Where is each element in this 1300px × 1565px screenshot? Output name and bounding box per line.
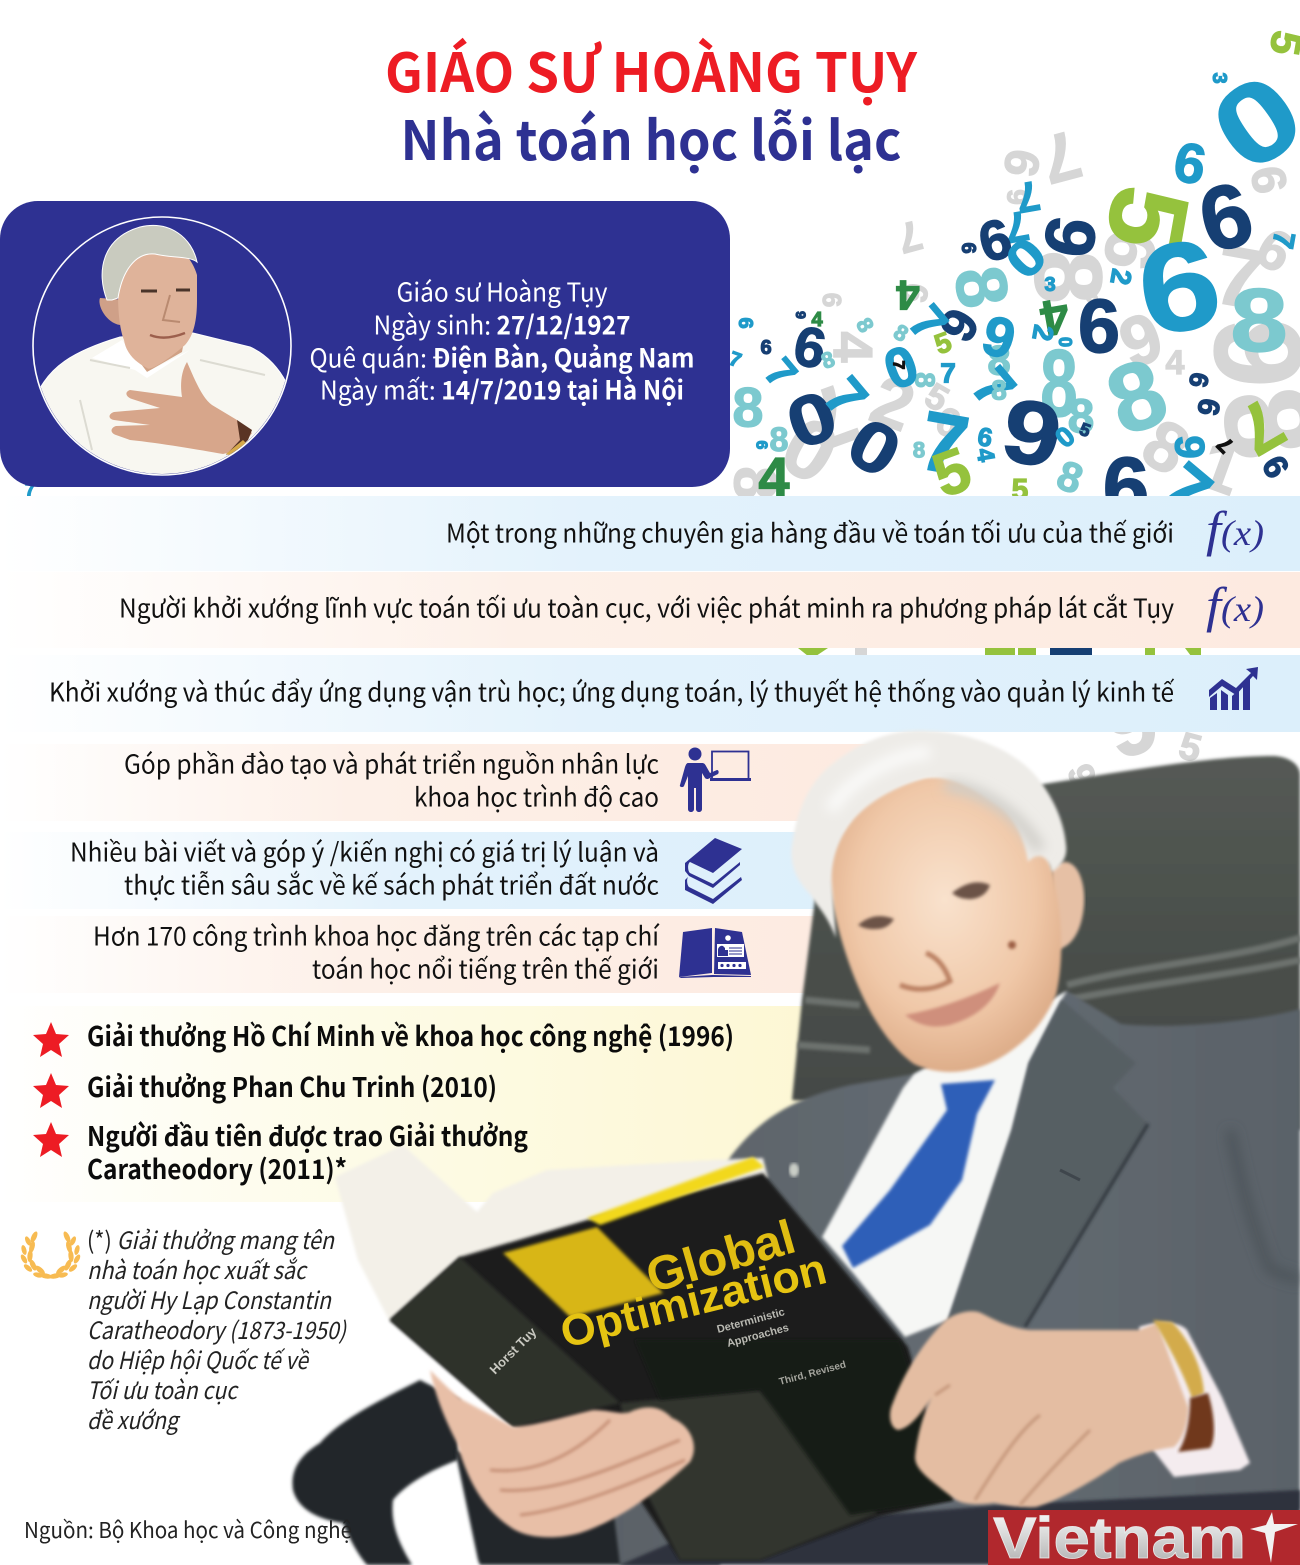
title	[385, 29, 918, 176]
background scattered numbers: 6	[1183, 370, 1215, 390]
background scattered numbers: 6	[1190, 396, 1226, 418]
decorative numbers below rows: 5	[1174, 725, 1206, 771]
footnote on Caratheodory prize: người Hy Lạp Constantin	[87, 1281, 332, 1316]
panel: awards background	[0, 1006, 820, 1202]
background scattered numbers: 3	[1208, 72, 1230, 84]
decorative numbers below rows: 9	[1059, 759, 1105, 791]
background scattered numbers: 9	[995, 378, 1069, 488]
awards list: Caratheodory (2011)*	[87, 1148, 347, 1187]
dark area under the book	[455, 1450, 720, 1565]
heading: subtitle: Nhà toán học lỗi lạc	[400, 97, 902, 176]
footnote on Caratheodory prize: Caratheodory (1873-1950)	[87, 1311, 347, 1346]
cuff	[1139, 1323, 1250, 1477]
biography text	[310, 272, 694, 408]
background scattered numbers: 7	[898, 294, 958, 352]
biography text: Giáo sư Hoàng Tụy	[396, 272, 608, 310]
biography text: Ngày mất: 14/7/2019 tại Hà Nội	[320, 370, 684, 408]
background scattered numbers: 7	[755, 349, 807, 397]
background scattered numbers: 4	[971, 446, 1000, 465]
background scattered numbers: 0	[1049, 420, 1081, 454]
decorative numbers below rows	[1059, 665, 1206, 791]
background scattered numbers: 6	[993, 145, 1049, 181]
background scattered numbers: 0	[766, 398, 854, 502]
footnote on Caratheodory prize: do Hiệp hội Quốc tế về	[87, 1341, 310, 1376]
background scattered numbers: 4	[758, 446, 790, 508]
background scattered numbers: 8	[910, 372, 940, 388]
lapel pin	[789, 1163, 799, 1177]
icon: open journal	[679, 928, 751, 978]
background scattered numbers: 6	[930, 399, 966, 447]
background scattered numbers: 6	[895, 280, 935, 306]
background scattered numbers: 6	[1169, 129, 1211, 197]
background scattered numbers: 4	[896, 272, 920, 318]
book cover title: Approaches	[726, 1322, 790, 1350]
background scattered numbers: 7	[1012, 172, 1044, 222]
background scattered numbers: 8	[1040, 329, 1078, 437]
background scattered numbers: 7	[1033, 115, 1089, 199]
background scattered numbers: 8	[732, 376, 764, 438]
background scattered numbers: 5	[1077, 419, 1093, 441]
background scattered numbers: 8	[1230, 269, 1288, 371]
footnote on Caratheodory prize: (*) Giải thưởng mang tên	[87, 1221, 335, 1256]
shirt	[822, 991, 1067, 1337]
photo: professor with book	[292, 730, 1300, 1565]
background scattered numbers: 8	[770, 421, 788, 459]
background scattered numbers: 4	[1166, 344, 1185, 382]
background scattered numbers: 2	[861, 360, 925, 446]
icon: star	[33, 1122, 69, 1157]
awards list: Người đầu tiên được trao Giải thưởng	[87, 1115, 528, 1154]
footnote on Caratheodory prize: đề xướng	[87, 1401, 181, 1436]
background scattered numbers: 7	[812, 365, 880, 429]
book cover title: Deterministic	[716, 1306, 786, 1336]
background scattered numbers: 7	[1225, 383, 1297, 471]
row: global optimization	[0, 572, 1300, 648]
background scattered numbers: 1	[1189, 424, 1253, 510]
book yellow block	[503, 1227, 663, 1317]
icon: star	[33, 1022, 69, 1057]
icon: f(x): f	[1206, 577, 1220, 633]
biography text: Ngày sinh: 27/12/1927	[374, 306, 630, 342]
background scattered numbers: 8	[1094, 338, 1180, 456]
background scattered numbers: 7	[726, 348, 744, 372]
book cover title: Global	[640, 1211, 801, 1304]
background scattered numbers: 8	[722, 466, 788, 500]
chair back	[792, 756, 1300, 1130]
background scattered numbers: 6	[1103, 440, 1149, 534]
background scattered numbers: 4	[811, 309, 823, 331]
background scattered numbers: 7	[1146, 448, 1226, 532]
background scattered numbers: 7	[794, 365, 870, 469]
right hand	[890, 1311, 1188, 1507]
book cover title: Horst Tuy	[487, 1324, 540, 1377]
heading: main title: GIÁO SƯ HOÀNG TỤY	[385, 29, 918, 108]
footnote on Caratheodory prize	[87, 1221, 347, 1436]
icon: laurel wreath	[19, 1230, 82, 1280]
background scattered numbers: 6	[1127, 211, 1231, 363]
row: training: khoa học trình độ cao	[414, 778, 659, 814]
row: articles	[0, 832, 880, 909]
background scattered numbers: 7	[940, 358, 956, 388]
background scattered numbers: 8	[938, 260, 1024, 314]
icon: star	[33, 1073, 69, 1108]
face	[828, 775, 1061, 1072]
background scattered numbers: 9	[1109, 297, 1173, 383]
background scattered numbers: 8	[991, 374, 1007, 406]
background scattered numbers	[25, 27, 1300, 534]
chair seams	[798, 938, 1300, 1050]
background scattered numbers: 6	[817, 293, 847, 307]
row: global optimization: Người khởi xướng lĩnh vực toán tối ưu toàn cục, với việc phát minh ra phương pháp lát cắt Tụy	[119, 588, 1174, 626]
background scattered numbers: 6	[957, 242, 979, 254]
background scattered numbers: 5	[924, 435, 980, 511]
icon: f(x): (x)	[1221, 589, 1264, 629]
right lapel	[948, 1000, 1148, 1327]
background scattered numbers: 6	[1189, 163, 1263, 273]
panel: biography card	[0, 201, 730, 487]
background scattered numbers: 8	[1014, 250, 1122, 304]
hair	[791, 730, 1066, 938]
icon: teacher at board	[680, 748, 751, 812]
background scattered numbers: 8	[1068, 390, 1094, 444]
icon: stack of books	[685, 838, 742, 904]
background scattered numbers: 7	[890, 361, 906, 370]
background scattered numbers: 2	[1026, 323, 1060, 343]
background scattered numbers: 6	[1078, 284, 1120, 370]
background scattered numbers: 6	[1088, 224, 1172, 276]
background scattered numbers: 3	[1086, 282, 1098, 308]
portrait photo	[33, 217, 291, 480]
background scattered numbers: 6	[760, 337, 772, 359]
wristwatch	[1153, 1320, 1204, 1398]
background scattered numbers: 6	[1240, 162, 1296, 198]
book cover	[390, 1173, 953, 1560]
biography text: Quê quán: Điện Bàn, Quảng Nam	[310, 338, 694, 376]
book cover title: Optimization	[556, 1244, 831, 1358]
background scattered numbers: 3	[1044, 274, 1056, 296]
jacket	[600, 991, 1300, 1565]
background scattered numbers: 9	[1002, 189, 1032, 205]
background scattered numbers: 6	[972, 206, 1018, 274]
sleeve fold	[1230, 1130, 1300, 1280]
row: training: Góp phần đào tạo và phát triển nguồn nhân lực	[124, 744, 659, 782]
book lower pages	[620, 1390, 877, 1560]
background scattered numbers: 6	[975, 421, 995, 453]
book cover title	[487, 1211, 847, 1388]
ear	[1052, 862, 1084, 950]
background scattered numbers: 7	[1265, 229, 1300, 251]
background scattered numbers: 5	[1083, 178, 1213, 258]
background scattered numbers: 8	[818, 346, 838, 374]
awards list	[33, 1015, 734, 1187]
background scattered numbers: 8	[1130, 403, 1202, 491]
background scattered numbers: 5	[918, 374, 956, 420]
book spine	[390, 1257, 620, 1427]
background scattered numbers: 2	[1104, 267, 1138, 287]
background scattered numbers: 6	[752, 441, 770, 450]
row: operations research: Khởi xướng và thúc đẩy ứng dụng vận trù học; ứng dụng toán, lý thuyết hệ thống vào quản lý kinh tế	[49, 672, 1175, 710]
background scattered numbers: 9	[1028, 211, 1112, 263]
background scattered numbers: 7	[1001, 202, 1033, 252]
background scattered numbers: 6	[928, 299, 990, 351]
icon: f(x): f	[1206, 501, 1220, 557]
left hand	[430, 1370, 694, 1537]
book yellow stripe	[587, 1157, 764, 1225]
awards list: Giải thưởng Phan Chu Trinh (2010)	[87, 1066, 497, 1105]
row: articles: thực tiễn sâu sắc về kế sách phát triển đất nước	[124, 866, 659, 902]
book cover title: Third, Revised	[778, 1359, 847, 1388]
facial features	[858, 882, 1016, 1027]
footnote on Caratheodory prize: Tối ưu toàn cục	[87, 1371, 239, 1406]
background scattered numbers: 4	[822, 331, 884, 363]
row: operations research	[0, 655, 1300, 732]
icon: growth chart	[1209, 667, 1258, 710]
background scattered numbers: 6	[734, 317, 756, 329]
footnote on Caratheodory prize: nhà toán học xuất sắc	[87, 1251, 308, 1286]
background scattered numbers: 8	[913, 438, 925, 462]
chair arm	[292, 1380, 460, 1565]
background scattered numbers: 7	[960, 355, 1028, 419]
background scattered numbers: 7	[1212, 432, 1238, 458]
row: publications: toán học nổi tiếng trên thế giới	[312, 950, 659, 986]
row: publications: Hơn 170 công trình khoa học đăng trên các tạp chí	[93, 916, 660, 954]
awards list: Giải thưởng Hồ Chí Minh về khoa học công nghệ (1996)	[87, 1015, 734, 1054]
background scattered numbers: 7	[893, 211, 927, 263]
background scattered numbers: 9	[1166, 435, 1214, 459]
background scattered numbers: 8	[889, 319, 913, 347]
background scattered numbers: 0	[834, 403, 914, 493]
background scattered numbers: 8	[851, 313, 879, 337]
background scattered numbers: 6	[1254, 449, 1296, 485]
row: leading expert: Một trong những chuyên gia hàng đầu về toán tối ưu của thế giới	[446, 514, 1174, 550]
background scattered numbers: 8	[1051, 451, 1089, 503]
background scattered numbers: 5	[1012, 474, 1028, 506]
logo plus mark	[1250, 1512, 1298, 1563]
background scattered numbers: 9	[976, 303, 1022, 371]
background scattered numbers: 7	[913, 393, 975, 493]
trousers	[620, 1490, 1300, 1565]
background scattered numbers: 6	[789, 313, 831, 381]
background scattered numbers: 0	[876, 332, 926, 402]
tie	[842, 1080, 995, 1268]
background scattered numbers: 4	[1036, 287, 1074, 347]
book pages	[335, 1145, 768, 1322]
row: leading expert	[0, 496, 1300, 571]
row: publications	[0, 916, 880, 993]
background scattered numbers: 8	[987, 336, 1011, 384]
background scattered numbers: 9	[793, 311, 809, 319]
background scattered numbers: 7	[25, 480, 35, 500]
row: training	[0, 744, 880, 821]
background scattered numbers: 5	[930, 326, 956, 360]
source credit: Nguồn: Bộ Khoa học và Công nghệ	[24, 1513, 352, 1545]
background scattered numbers: 7	[1208, 227, 1270, 327]
background scattered numbers: 0	[1055, 337, 1075, 347]
background scattered numbers: 0	[777, 375, 847, 465]
row: articles: Nhiều bài viết và góp ý /kiến nghị có giá trị lý luận và	[70, 832, 659, 870]
number fragments in gap between rows	[798, 648, 1201, 656]
icon: f(x): (x)	[1221, 513, 1264, 553]
background scattered numbers: 0	[994, 226, 1058, 290]
decorative numbers below rows: 6	[1089, 665, 1171, 779]
